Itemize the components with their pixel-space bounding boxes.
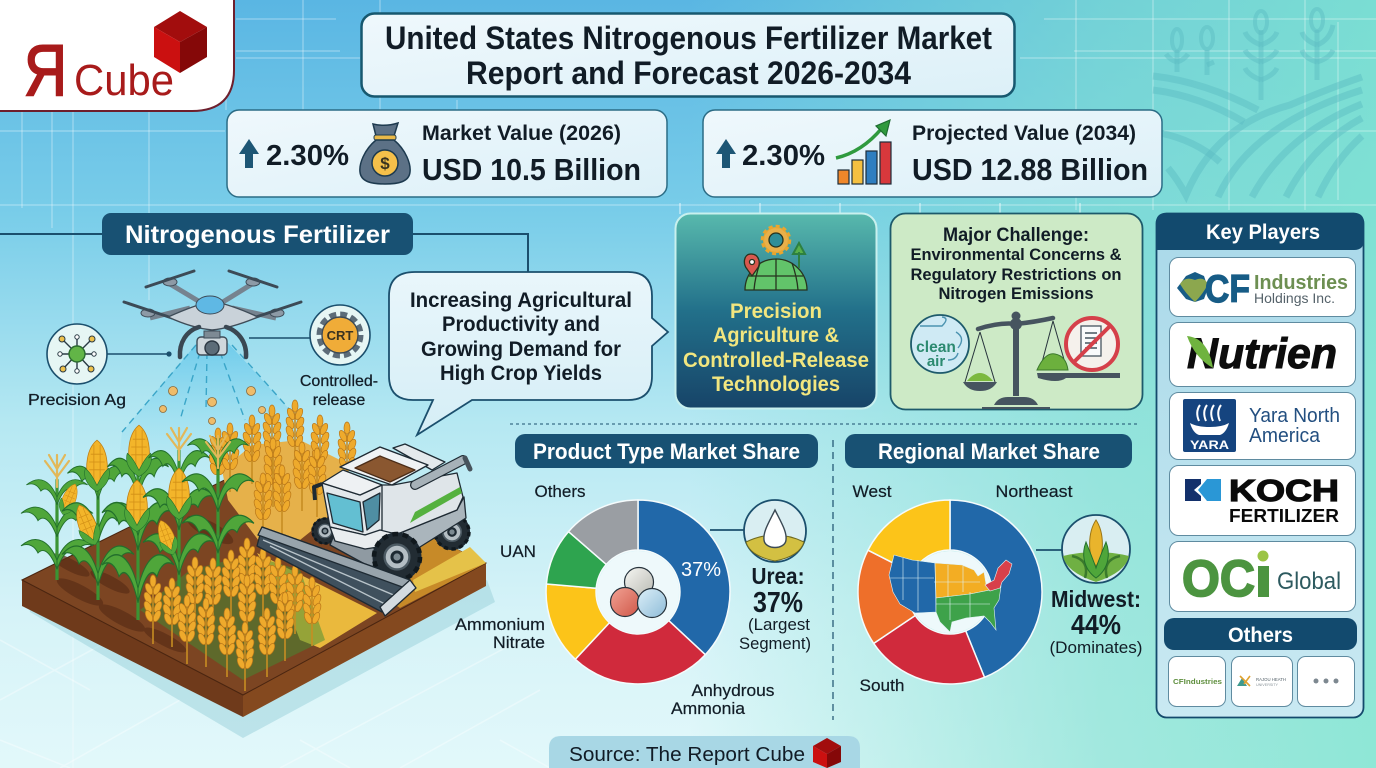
icon: controlled-release CRT <box>249 305 370 365</box>
logo: Yara North America <box>1170 392 1356 460</box>
panel: major challenge: Nitrogen Emissions <box>938 284 1094 303</box>
logo: Yara North America: America <box>1249 425 1321 447</box>
logo: Yara North America: Yara North <box>1249 405 1340 427</box>
logo: OCI Global <box>1170 542 1356 612</box>
chart labels: regions <box>852 482 1073 695</box>
icon: fertilizer granules <box>597 551 679 633</box>
title <box>362 14 1014 96</box>
heading: product type market share <box>515 434 818 468</box>
callout: urea: (Largest <box>748 615 810 634</box>
spray cone <box>120 343 300 470</box>
icon: up arrow <box>716 139 736 168</box>
icon: no regulation document <box>1066 318 1118 370</box>
logo: OCI Global: Global <box>1277 568 1341 595</box>
chart labels: product types: Ammonia <box>671 699 746 718</box>
icon: clean air <box>911 315 969 373</box>
title: United States Nitrogenous Fertilizer Market <box>385 20 992 56</box>
panel: key players <box>1156 213 1364 718</box>
stat card: market value 2026 <box>227 110 667 197</box>
callout: midwest: Midwest: <box>1051 586 1141 612</box>
logo: CF Industries: Industries <box>1254 272 1348 294</box>
callout: midwest <box>1036 515 1142 657</box>
icon: balance scale <box>963 312 1120 408</box>
chart: product type donut <box>546 500 730 684</box>
wheat field, front <box>140 538 377 691</box>
panel: key players: Key Players <box>1206 221 1320 244</box>
callout: midwest: (Dominates) <box>1050 638 1142 657</box>
logo: RCube: Я <box>24 31 67 111</box>
more companies card <box>1298 656 1354 706</box>
label: controlled-release: Controlled- <box>300 373 378 390</box>
chart labels: product types: Anhydrous <box>692 681 774 700</box>
chart labels: regions: West <box>852 482 892 501</box>
logo: RCube: Cube <box>74 56 174 105</box>
chart labels: product types: Nitrate <box>493 633 545 652</box>
logo: RCube <box>0 0 234 111</box>
label: 37%: 37% <box>681 559 721 581</box>
callout: urea: Segment) <box>739 634 811 653</box>
panel: precision agriculture <box>676 214 876 408</box>
logo: CF Industries: CF <box>1205 268 1250 311</box>
field platform <box>22 460 495 738</box>
icon: clean air: clean <box>916 339 956 356</box>
logo: small CF Industries <box>1168 656 1226 706</box>
stat card: projected value 2034: Projected Value (2034) <box>912 122 1136 145</box>
callout: urea <box>710 500 811 653</box>
icon: clean air: air <box>927 353 945 370</box>
panel: precision agriculture: Precision <box>730 300 822 323</box>
icon: money bag: $ <box>380 154 390 173</box>
connector lines for heading <box>0 234 528 272</box>
chart labels: product types: Others <box>534 482 586 501</box>
stat card: projected value 2034: 2.30% <box>742 140 825 172</box>
stat card: market value 2026: USD 10.5 Billion <box>422 152 641 187</box>
chart labels: product types <box>455 482 774 718</box>
logo: small second company <box>1232 656 1292 706</box>
callout: urea: 37% <box>753 587 803 619</box>
wheat field, back <box>207 400 358 545</box>
callout: midwest: 44% <box>1071 609 1121 640</box>
icon: growth chart <box>836 120 891 184</box>
panel: precision agriculture: Agriculture & <box>713 324 839 347</box>
label: controlled-release <box>300 373 378 409</box>
chart labels: regions: South <box>860 676 904 695</box>
logo: Koch Fertilizer: FERTILIZER <box>1229 506 1339 526</box>
map: United States regions <box>889 551 1012 633</box>
stat card: market value 2026: Market Value (2026) <box>422 122 621 145</box>
speech bubble: Productivity and <box>442 313 600 336</box>
speech bubble: Increasing Agricultural <box>410 289 632 312</box>
heading: others <box>1164 618 1357 650</box>
icon: small cube <box>813 738 841 768</box>
dividers <box>510 424 1140 720</box>
panel: precision agriculture: Controlled-Release <box>683 349 869 372</box>
heading: regional market share: Regional Market Share <box>878 439 1100 464</box>
corn plants <box>21 425 254 620</box>
heading: product type market share: Product Type Market Share <box>533 439 800 464</box>
logo: small CF Industries: CFIndustries <box>1173 677 1222 686</box>
panel: major challenge <box>890 214 1142 410</box>
icon: controlled-release CRT: CRT <box>327 328 353 343</box>
watermark: field and wheat <box>1153 9 1362 197</box>
speech bubble: High Crop Yields <box>440 362 602 385</box>
panel: precision agriculture: Technologies <box>712 373 840 396</box>
heading: Nitrogenous Fertilizer <box>102 213 413 255</box>
logo: small second company: RAJOU HEATH <box>1256 677 1286 682</box>
heading: Nitrogenous Fertilizer: Nitrogenous Fertilizer <box>125 221 390 249</box>
icon: drone <box>124 271 301 357</box>
speech bubble: Growing Demand for <box>421 338 621 361</box>
panel: major challenge: Major Challenge: <box>943 225 1089 246</box>
logo: Nutrien <box>1170 322 1356 386</box>
illustration: farm field with drone and harvester <box>21 343 495 738</box>
source <box>549 736 860 768</box>
harvester <box>257 444 470 616</box>
icon: money bag <box>360 123 410 184</box>
stat card: projected value 2034: USD 12.88 Billion <box>912 152 1148 187</box>
callout: urea: Urea: <box>752 563 804 589</box>
stat card: market value 2026: 2.30% <box>266 140 349 172</box>
speech bubble <box>389 272 668 435</box>
logo: small second company: UNIVERSITY <box>1256 682 1278 687</box>
panel: major challenge: Regulatory Restrictions on <box>910 265 1122 284</box>
title: Report and Forecast 2026-2034 <box>466 55 911 91</box>
logo: Yara North America: YARA <box>1190 438 1229 452</box>
logo: Koch Fertilizer <box>1170 466 1356 536</box>
chart labels: product types: UAN <box>500 542 536 561</box>
icon: precision ag <box>47 324 172 384</box>
heading: regional market share <box>845 434 1132 468</box>
chart: regional donut <box>858 500 1042 684</box>
icon: globe, gear, pin and arrow <box>744 226 807 290</box>
stat card: projected value 2034 <box>703 110 1162 197</box>
logo: CF Industries <box>1170 258 1356 316</box>
logo: Koch Fertilizer: KOCH <box>1229 473 1339 508</box>
logo: CF Industries: Holdings Inc. <box>1254 290 1335 306</box>
chart labels: product types: Ammonium <box>455 615 545 634</box>
label: precision ag: Precision Ag <box>28 392 126 409</box>
icon: up arrow <box>239 139 259 168</box>
logo: OCI Global: OC <box>1182 550 1255 607</box>
logo: Nutrien: Nutrien <box>1187 330 1337 378</box>
panel: major challenge: Environmental Concerns & <box>910 245 1122 264</box>
heading: others: Others <box>1228 624 1293 647</box>
source: Source: The Report Cube <box>569 744 805 766</box>
label: controlled-release: release <box>313 392 365 409</box>
chart labels: regions: Northeast <box>996 482 1073 501</box>
